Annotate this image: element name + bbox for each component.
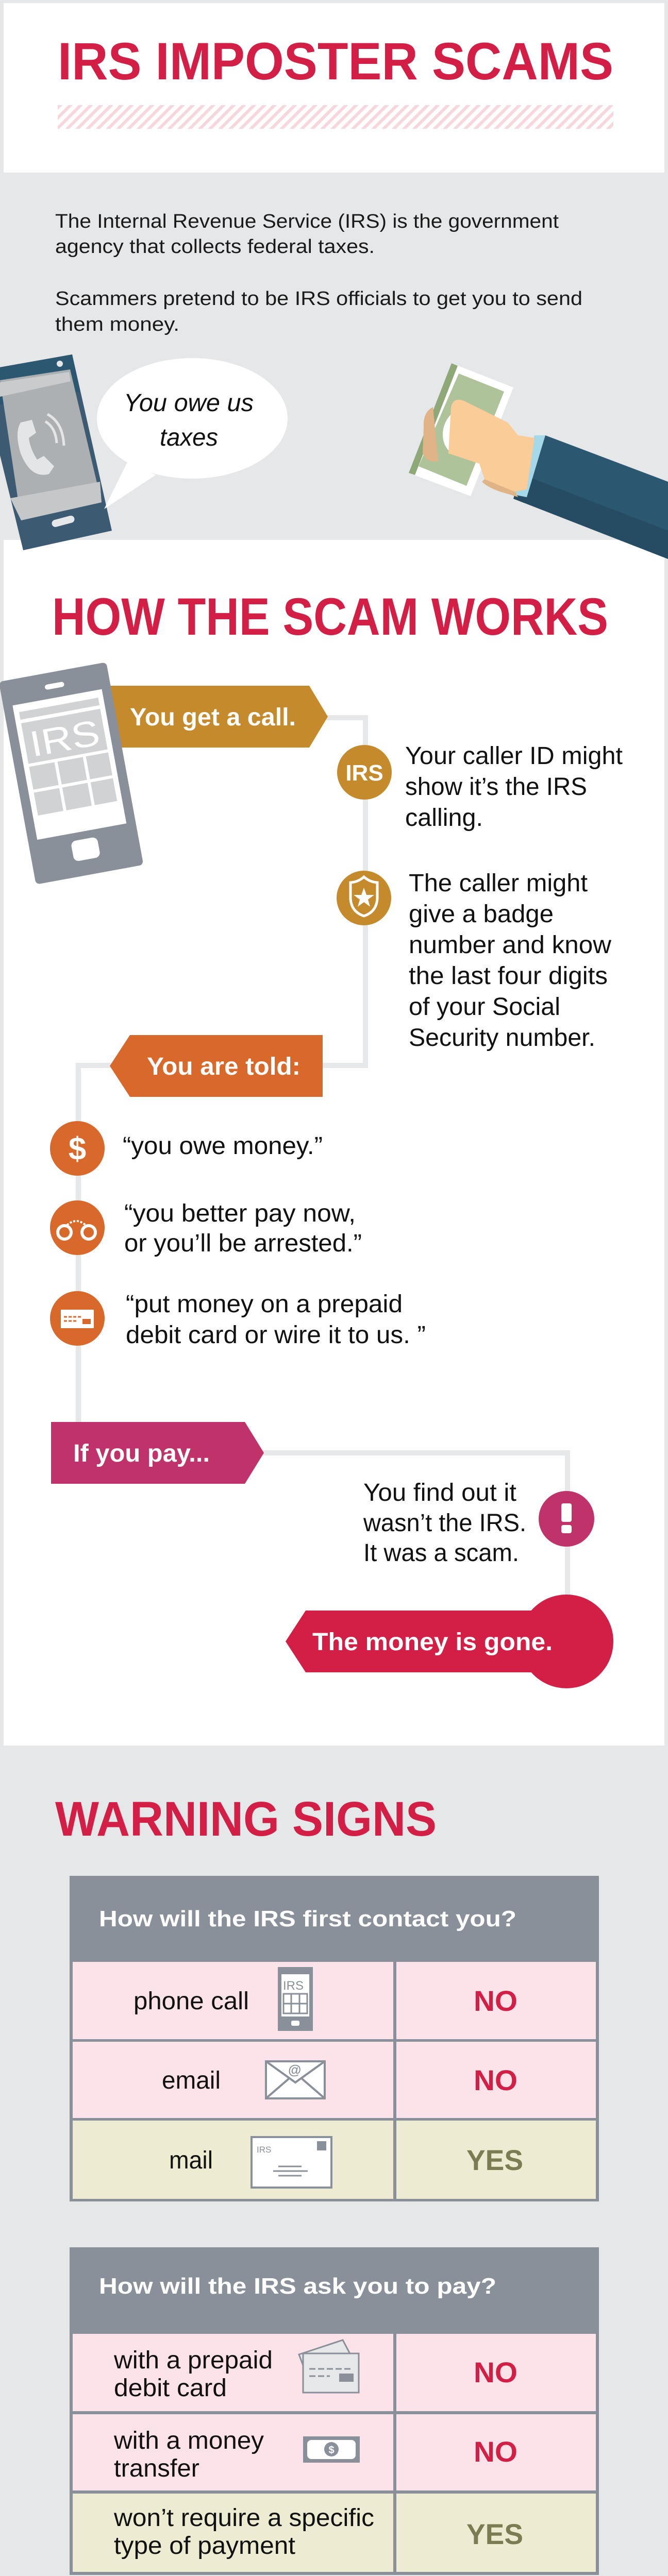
text: arrested: “you better pay now, [124,1200,356,1227]
text: badge [409,870,611,1052]
text: badge: give a badge [409,901,554,928]
panel: title [4,3,664,173]
text: caller id: calling. [405,804,483,832]
icon: badge [337,871,391,925]
text: you find out: You find out it [363,1479,516,1506]
heading: warning signs: WARNING SIGNS [55,1792,437,1846]
banner: if you pay: If you pay... [73,1440,210,1467]
text: arrested [124,1200,362,1257]
row: no specific payment: won’t require a specific [113,2504,374,2532]
banner: you are told [110,1035,323,1097]
table: first contact: How will the IRS first contact you? [99,1906,516,1931]
icon: blue phone [0,354,112,550]
row: money transfer [113,2427,517,2482]
banner: you are told: You are told: [147,1053,300,1080]
table: how to pay: How will the IRS ask you to pay? [99,2274,496,2299]
text: caller id: Your caller ID might [405,742,623,770]
table: first contact [70,1876,599,2201]
text: badge: the last four digits [409,962,608,990]
text: caller id: show it’s the IRS [405,773,587,801]
row: prepaid card: debit card [114,2375,227,2402]
text: arrested: or you’ll be arrested.” [124,1230,362,1257]
text: you find out: wasn’t the IRS. [363,1510,526,1537]
text: prepaid [126,1291,426,1349]
title: IRS IMPOSTER SCAMS [58,32,613,91]
row: email [162,2061,517,2098]
row: mail: IRS [257,2145,271,2155]
icon: handcuffs [50,1200,105,1255]
icon: dollar [50,1121,105,1176]
row: prepaid card: with a prepaid [113,2347,273,2374]
text: caller id [405,742,623,832]
callout: speech bubble: You owe us [124,389,254,417]
row: email: email [162,2067,221,2094]
panel: how the scam works [4,540,664,1745]
text: badge: The caller might [409,870,588,897]
icon: gray IRS phone: IRS [27,712,103,765]
row: phone call: NO [474,1985,517,2017]
row: no specific payment: type of payment [114,2532,295,2560]
heading: how the scam works: HOW THE SCAM WORKS [52,587,608,646]
text: you find out [363,1479,526,1567]
row: money transfer: with a money [113,2427,264,2454]
icon: gray IRS phone [0,662,143,885]
text block: intro: agency that collects federal taxes. [55,236,375,258]
text: prepaid: debit card or wire it to us. ” [126,1321,426,1349]
text: badge: number and know [409,931,611,959]
row: money transfer: transfer [114,2455,199,2482]
connector lines [78,718,365,1425]
table: how to pay [70,2247,599,2575]
panel: intro [55,211,582,335]
callout: speech bubble [97,358,288,509]
row: phone call [133,1967,517,2031]
row: mail: mail [169,2147,213,2174]
row: no specific payment: YES [466,2518,523,2550]
row: phone call: IRS [283,1979,304,1993]
banner: if you pay [51,1422,264,1484]
row: email: NO [474,2064,517,2096]
row: prepaid card [113,2340,517,2402]
text block: intro: The Internal Revenue Service (IRS) is the government [55,211,559,232]
row: no specific payment [113,2504,523,2560]
callout: speech bubble: taxes [160,424,218,451]
row: phone call: phone call [133,1988,249,2015]
text: prepaid: “put money on a prepaid [126,1291,403,1318]
text: you owe money: “you owe money.” [123,1132,323,1160]
text block: intro [55,211,582,335]
banner: the money is gone [286,1595,613,1688]
icon: hand with money: $ [450,415,474,447]
icon: hand with money [409,363,668,559]
text block: intro: Scammers pretend to be IRS officials to get you to send [55,288,582,310]
row: prepaid card: NO [474,2356,517,2388]
icon: dollar: $ [69,1131,86,1167]
row: mail [169,2137,523,2188]
hatched stripe [58,105,613,129]
icon: IRS caller id: IRS [345,760,383,786]
text: badge: of your Social [409,993,560,1021]
text block: intro: them money. [55,314,179,335]
text: badge: Security number. [409,1024,595,1052]
banner: you get a call [103,686,328,748]
row: money transfer: NO [474,2435,517,2468]
icon: IRS caller id [337,745,392,800]
text: you find out: It was a scam. [363,1539,519,1567]
row: email: @ [288,2062,301,2077]
icon: exclamation [539,1491,594,1547]
row: mail: YES [466,2144,523,2176]
banner: the money is gone: The money is gone. [312,1629,553,1656]
banner: you get a call: You get a call. [130,704,296,731]
icon: card [50,1291,105,1346]
row: money transfer: $ [328,2445,335,2456]
